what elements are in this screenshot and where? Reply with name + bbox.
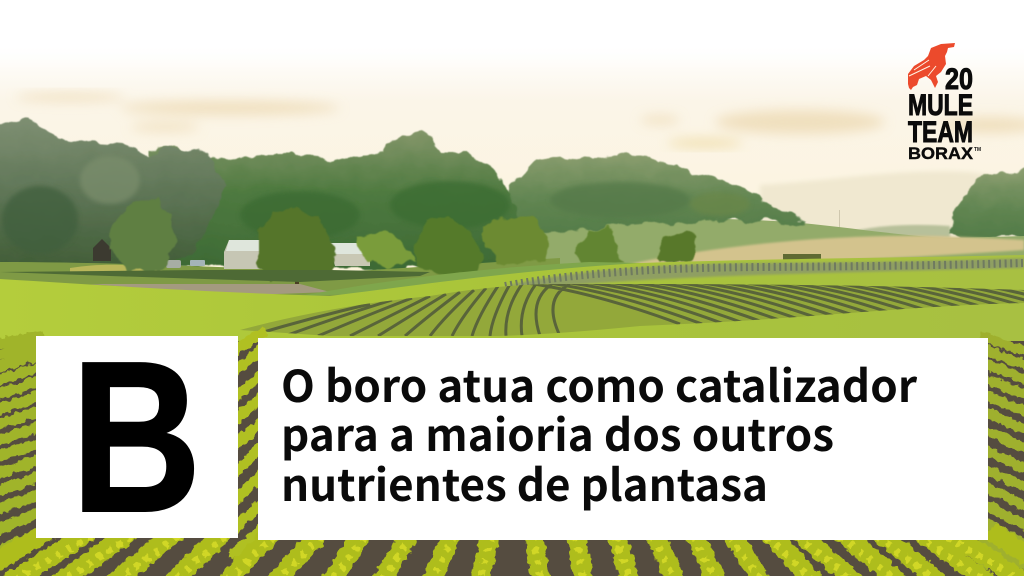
crop rows: gap between boxes xyxy=(230,330,266,556)
headline text xyxy=(281,351,918,514)
distant tree line and pole xyxy=(839,210,950,238)
distant hills xyxy=(760,171,1024,240)
forest right edge xyxy=(948,170,1024,238)
logo wordmark xyxy=(908,63,981,163)
sky with clouds xyxy=(0,0,1024,340)
striped band tones xyxy=(505,258,1024,286)
top white fade xyxy=(0,0,1024,70)
forest centre right xyxy=(500,152,808,236)
large letter B: B xyxy=(71,317,201,558)
hazy tree texture xyxy=(2,156,750,254)
foreground trees xyxy=(110,197,696,280)
headline text: O boro atua como catalizador xyxy=(281,351,918,415)
panel: headline box xyxy=(258,338,988,540)
icon: red mule xyxy=(908,43,955,90)
forest left xyxy=(0,120,228,272)
dirt road xyxy=(90,284,330,295)
meadow hill xyxy=(520,219,1024,270)
headline text: nutrientes de plantasa xyxy=(281,450,768,514)
panel: letter B box xyxy=(36,317,238,558)
lawn xyxy=(0,258,560,345)
tree trunk xyxy=(295,278,299,285)
logo wordmark: MULE xyxy=(908,89,973,122)
logo wordmark: 20 xyxy=(945,63,973,96)
headline text: para a maioria dos outros xyxy=(281,400,834,464)
forest centre xyxy=(150,130,525,268)
crop rows: foreground fan xyxy=(0,530,1024,576)
logo wordmark: BORAX xyxy=(908,144,974,163)
logo wordmark: TEAM xyxy=(908,116,973,149)
small house and vehicles xyxy=(93,239,205,268)
logo: 20 Mule Team Borax xyxy=(908,43,981,163)
crop rows: right edge xyxy=(980,336,1024,576)
crop rows: left edge xyxy=(0,337,44,554)
grass strip by field xyxy=(300,262,700,296)
crop rows: middle band xyxy=(240,284,1024,336)
crop rows: far band xyxy=(505,263,1024,286)
leaf highlights on foreground rows xyxy=(14,536,1020,576)
shrub band and dark hedge xyxy=(0,254,821,282)
barns xyxy=(224,240,370,269)
crop field base xyxy=(0,255,1024,345)
foreground soil xyxy=(0,341,1024,576)
tan grass patch xyxy=(620,236,1024,266)
logo wordmark: TM xyxy=(974,147,981,153)
